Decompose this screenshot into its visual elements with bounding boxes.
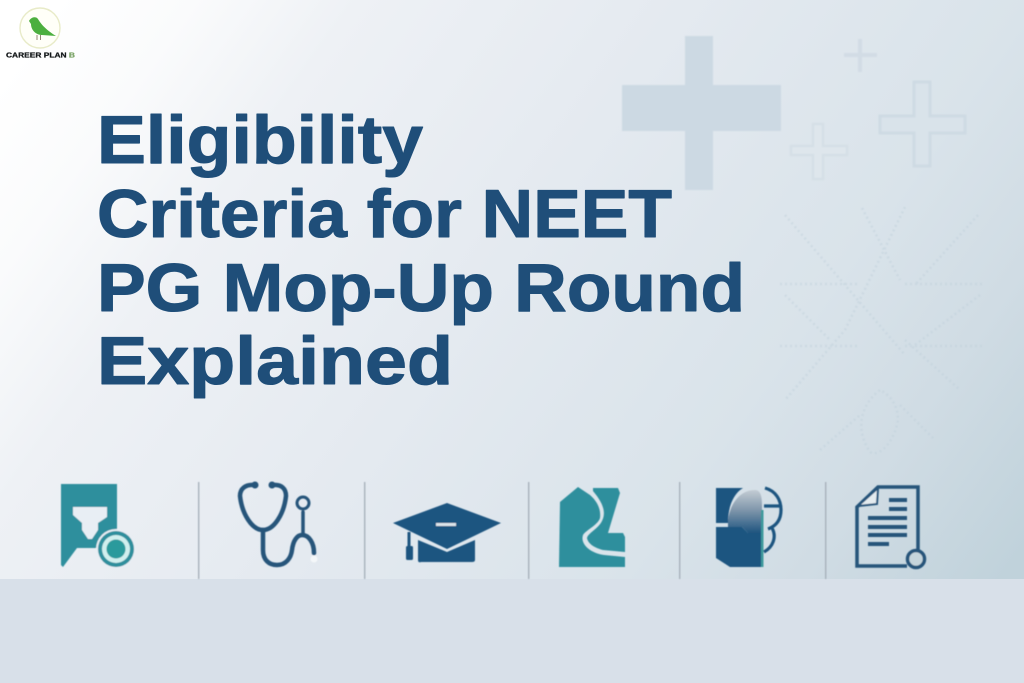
bottom band — [0, 579, 1024, 683]
title line 4: Explained — [97, 323, 453, 399]
outlined cross right — [880, 82, 965, 166]
title line 1: Eligibility — [97, 102, 423, 178]
logo: Career Plan B — [6, 8, 75, 60]
icon 1: teal badge — [61, 484, 136, 569]
small faint cross — [844, 39, 877, 72]
decorative medical crosses — [622, 36, 965, 190]
faint dotted star diagram — [780, 207, 982, 453]
divider — [198, 482, 199, 579]
title line 2: Criteria for NEET — [97, 176, 672, 252]
icon 2: stethoscope — [240, 482, 318, 565]
divider — [364, 482, 365, 579]
icon 6: document with seal — [857, 487, 924, 568]
logo wordmark: CAREER PLAN B — [6, 50, 75, 60]
icon row — [61, 482, 924, 579]
icon 5: shield and globe — [716, 488, 781, 567]
outlined cross middle — [791, 124, 847, 179]
icon: green bird — [29, 17, 56, 40]
icon 4: teal map shape — [559, 487, 625, 567]
title — [97, 102, 745, 399]
logo ring — [20, 8, 60, 48]
divider — [825, 482, 826, 579]
divider — [679, 482, 680, 579]
title line 3: PG Mop-Up Round — [97, 250, 745, 326]
icon 3: graduation cap — [393, 503, 501, 562]
large solid cross — [622, 36, 781, 190]
divider — [528, 482, 529, 579]
